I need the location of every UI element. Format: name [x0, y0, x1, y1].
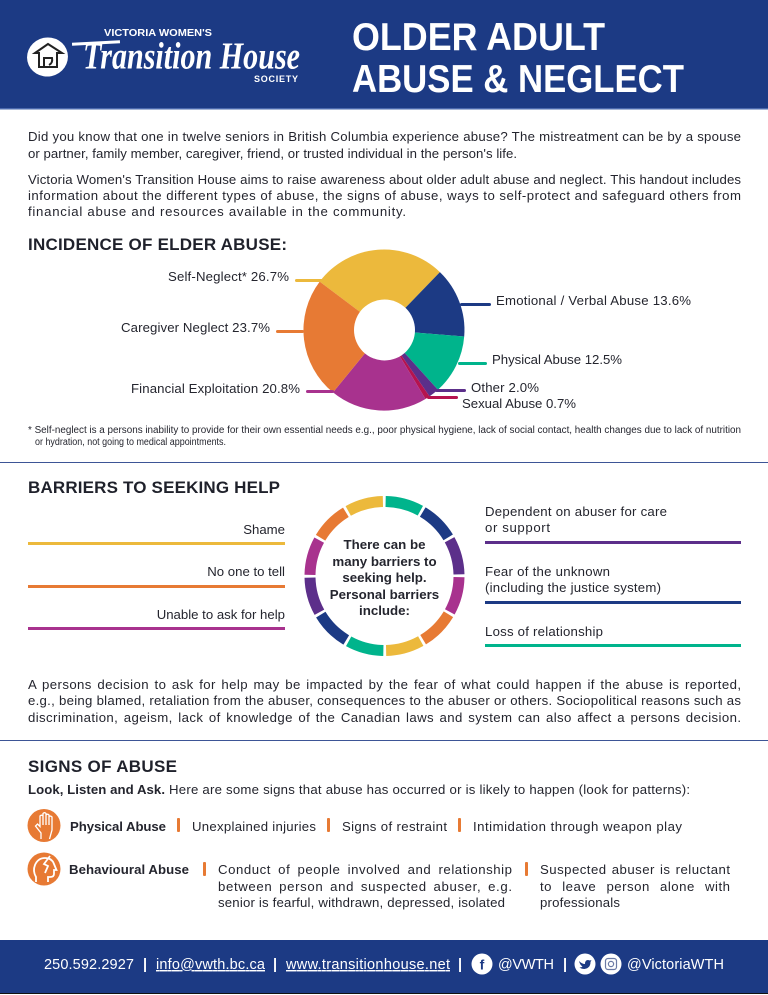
- intro text: [28, 129, 741, 219]
- intro text: financial abuse and resources available in the community.: [28, 204, 406, 219]
- signs intro: Look, Listen and Ask.: [28, 782, 165, 797]
- physical abuse row: [28, 809, 682, 842]
- behavioural abuse row: Conduct of people involved and relationship: [218, 862, 512, 877]
- footer banner: |: [563, 957, 567, 973]
- barriers paragraph: e.g., being blamed, retaliation from the abuser, consequences to the abuser or others. Sociopolitical reasons such as: [28, 693, 741, 708]
- barrier: dependent on abuser: or support: [485, 520, 550, 535]
- physical abuse row: Signs of restraint: [342, 819, 447, 834]
- behavioural abuse row: [28, 852, 730, 910]
- behavioural abuse row: professionals: [540, 895, 620, 910]
- logo: Transition House: [83, 36, 300, 78]
- heading: incidence of elder abuse: INCIDENCE OF ELDER ABUSE:: [28, 235, 287, 254]
- icon: head: [28, 852, 60, 886]
- ring centre text: Personal barriers: [330, 587, 439, 602]
- ring centre text: [330, 537, 439, 618]
- intro text: Victoria Women's Transition House aims to raise awareness about older adult abuse and neglect. This handout includes: [28, 172, 741, 187]
- footer contacts: |: [458, 957, 462, 973]
- barrier: loss of relationship: Loss of relationship: [485, 624, 603, 639]
- footer contacts: |: [143, 957, 147, 973]
- intro text: information about the different types of abuse, the signs of abuse, ways to self-protect and safeguard others from: [28, 188, 741, 203]
- physical abuse row: Intimidation through weapon play: [473, 819, 682, 834]
- chart label: caregiver neglect: Caregiver Neglect 23.7%: [121, 320, 270, 335]
- logo: SOCIETY: [254, 74, 298, 84]
- chart label: financial exploitation: Financial Exploitation 20.8%: [131, 381, 300, 396]
- barriers paragraph: discrimination, ageism, lack of knowledge of the Canadian laws and system can also affect a persons decision.: [28, 710, 741, 725]
- title: [352, 16, 684, 101]
- footnote: or hydration, not going to medical appointments.: [35, 437, 226, 448]
- intro text: or partner, family member, caregiver, friend, or trusted individual in the person's life.: [28, 146, 517, 161]
- barrier: shame: [28, 522, 285, 545]
- footer contacts: |: [273, 957, 277, 973]
- signs intro: Here are some signs that abuse has occurred or is likely to happen (look for patterns):: [169, 782, 690, 797]
- footer contacts: www.transitionhouse.net: [285, 957, 450, 973]
- title: OLDER ADULT: [352, 16, 605, 59]
- heading: barriers: BARRIERS TO SEEKING HELP: [28, 478, 280, 497]
- donut chart: [303, 250, 464, 411]
- icon: facebook: [472, 954, 492, 974]
- footer contacts: info@vwth.bc.ca: [156, 957, 266, 973]
- footer contacts: [44, 957, 462, 973]
- ring centre text: include:: [359, 603, 410, 618]
- logo: [23, 27, 300, 84]
- physical abuse row: Physical Abuse: [70, 819, 166, 834]
- physical abuse row: Unexplained injuries: [192, 819, 316, 834]
- footer banner: [0, 940, 768, 994]
- ring centre text: There can be: [343, 537, 426, 552]
- intro text: Did you know that one in twelve seniors in British Columbia experience abuse? The mistreatment can be by a spouse: [28, 129, 741, 144]
- barrier: dependent on abuser: Dependent on abuser for care: [485, 504, 667, 519]
- barriers paragraph: [28, 677, 741, 725]
- chart label: sexual abuse: Sexual Abuse 0.7%: [462, 396, 576, 411]
- barrier ring: [282, 474, 487, 678]
- chart label: self-neglect: Self-Neglect* 26.7%: [168, 269, 289, 284]
- behavioural abuse row: Suspected abuser is reluctant: [540, 862, 730, 877]
- ring centre text: many barriers to: [332, 554, 437, 569]
- icon: hand: [28, 809, 60, 842]
- barrier: fear of the unknown: Fear of the unknown: [485, 564, 610, 579]
- chart label: other: Other 2.0%: [471, 380, 539, 395]
- barrier: unable to ask: Unable to ask for help: [157, 607, 285, 622]
- title: ABUSE & NEGLECT: [352, 58, 684, 101]
- behavioural abuse row: between person and suspected abuser, e.g.: [218, 879, 512, 894]
- chart label: physical abuse: Physical Abuse 12.5%: [492, 352, 622, 367]
- barriers paragraph: A persons decision to ask for help may be impacted by the fear of what could happen if the abuse is reported,: [28, 677, 741, 692]
- header banner: [0, 0, 768, 110]
- logo: VICTORIA WOMEN'S: [104, 27, 212, 39]
- chart label: other: [435, 380, 539, 395]
- barrier: no one to tell: [28, 564, 285, 588]
- icon: facebook: f: [480, 956, 485, 972]
- behavioural abuse row: to leave person alone with: [540, 879, 730, 894]
- barrier: dependent on abuser: [485, 504, 741, 544]
- barrier: fear of the unknown: (including the justice system): [485, 580, 661, 595]
- instagram and twitter handle: @VictoriaWTH: [627, 957, 724, 973]
- chart label: emotional abuse: Emotional / Verbal Abuse 13.6%: [496, 293, 691, 308]
- icon: twitter: [574, 954, 596, 974]
- footer contacts: 250.592.2927: [44, 957, 134, 973]
- footnote: * Self-neglect is a persons inability to provide for their own essential needs e.g., poor physical hygiene, lack of social contact, health changes due to lack of nutrition: [28, 425, 741, 436]
- facebook handle: @VWTH: [498, 957, 554, 973]
- behavioural abuse row: senior is fearful, withdrawn, depressed, isolated: [218, 895, 505, 910]
- barrier: unable to ask: [28, 607, 285, 630]
- barrier: shame: Shame: [243, 522, 285, 537]
- icon: instagram: [600, 954, 622, 974]
- ring centre text: seeking help.: [342, 570, 427, 585]
- footnote: [28, 425, 741, 448]
- barrier: loss of relationship: [485, 624, 741, 647]
- barrier: no one to tell: No one to tell: [207, 564, 285, 579]
- barrier: fear of the unknown: [485, 564, 741, 604]
- heading: signs of abuse: SIGNS OF ABUSE: [28, 757, 177, 776]
- behavioural abuse row: Behavioural Abuse: [69, 862, 189, 877]
